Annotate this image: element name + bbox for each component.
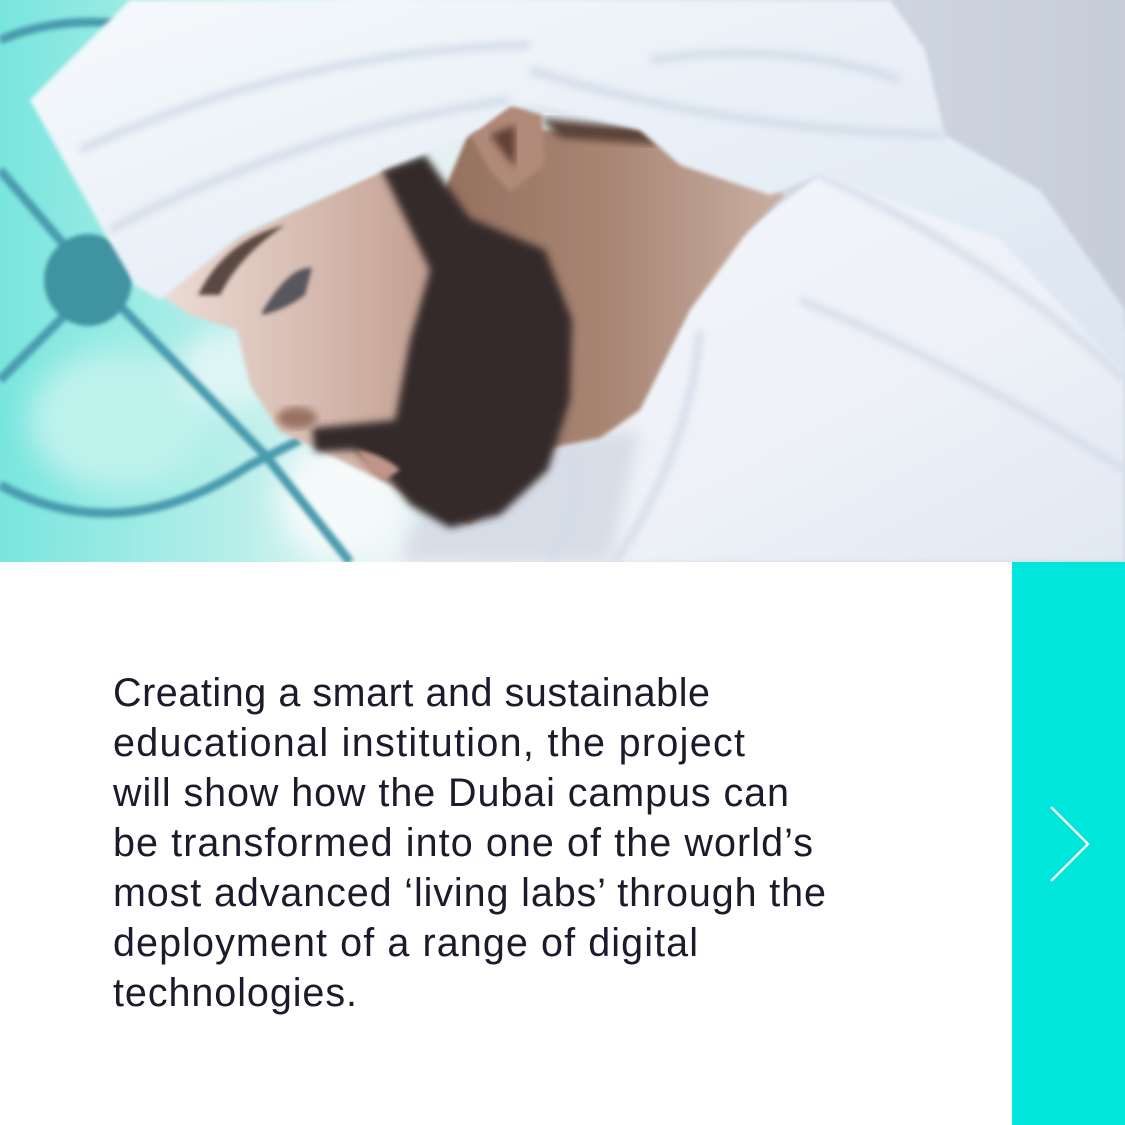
robe xyxy=(395,175,1125,562)
text block: body paragraph: technologies. xyxy=(113,971,357,1015)
photo: man in white headdress looking down xyxy=(0,0,1125,562)
text block: body paragraph: deployment of a range of digital xyxy=(113,921,698,965)
text block: body paragraph: educational institution, the project xyxy=(113,721,745,765)
neck xyxy=(440,130,785,450)
shadow beneath the beard xyxy=(400,430,640,562)
text block: body paragraph: be transformed into one of the world’s xyxy=(113,821,813,865)
text block: body paragraph xyxy=(112,671,826,1015)
eye xyxy=(262,268,312,315)
icon: right chevron arrow xyxy=(1050,806,1090,882)
panel: teal next-page sidebar xyxy=(1012,562,1125,1125)
ear xyxy=(470,105,545,192)
hair shadow under headdress xyxy=(540,118,660,145)
window lattice behind the man xyxy=(0,22,350,562)
robe fold shadows xyxy=(550,175,1125,562)
headdress xyxy=(30,0,1125,375)
nostril and lips xyxy=(277,407,317,429)
face xyxy=(160,170,560,525)
beard xyxy=(312,155,572,528)
text block: body paragraph: will show how the Dubai campus can xyxy=(112,771,789,815)
eyebrow hairline xyxy=(198,225,285,295)
soft light patches on the window xyxy=(30,330,400,560)
photo background xyxy=(0,0,1125,562)
text block: body paragraph: Creating a smart and sustainable xyxy=(113,671,710,715)
headdress folds xyxy=(80,45,945,230)
text block: body paragraph: most advanced ‘living labs’ through the xyxy=(113,871,826,915)
